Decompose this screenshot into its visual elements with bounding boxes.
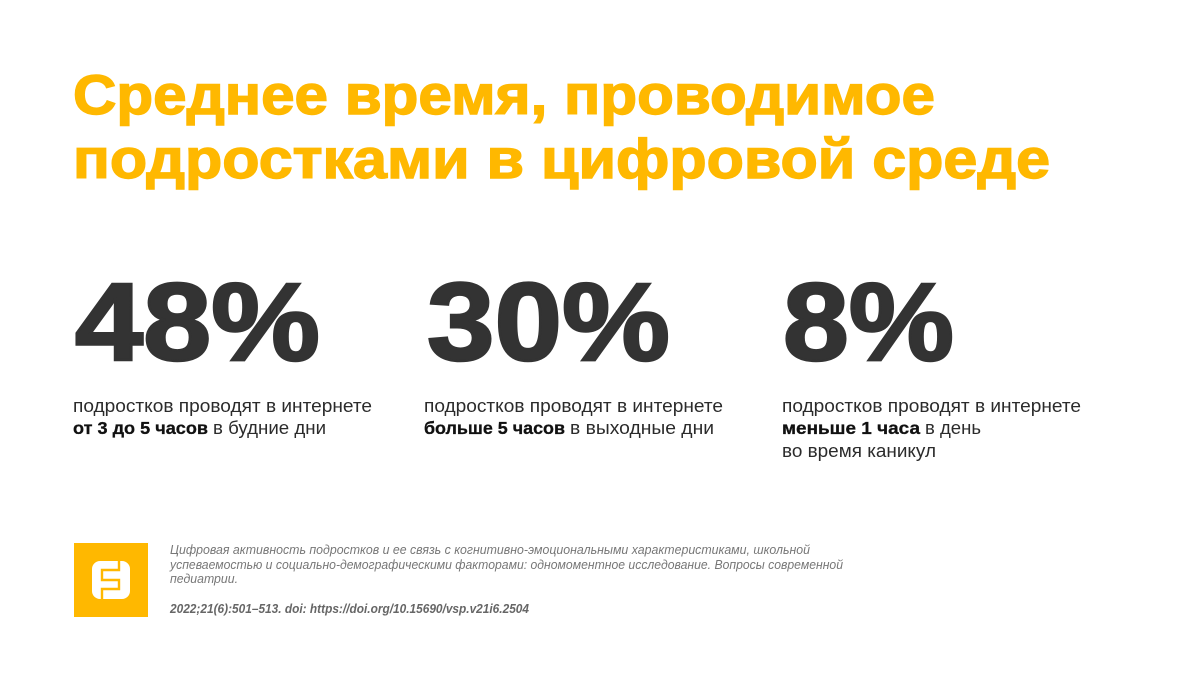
stat: 8%: 8% [783, 261, 954, 384]
description: 48% [73, 396, 372, 438]
stat: 48%: 48% [75, 261, 320, 384]
description: 48%: от 3 до 5 часов [73, 418, 208, 438]
description: 30%: в выходные дни [570, 418, 714, 438]
stat: 30%: 30% [427, 261, 670, 384]
stat: 30% [424, 261, 723, 438]
source citation: Цифровая активность подростков и ее связь с когнитивно-эмоциональными характеристиками, школьной [170, 543, 810, 557]
source citation: педиатрии. [170, 572, 238, 586]
description: 8%: подростков проводят в интернете [782, 396, 1081, 416]
source citation [169, 543, 843, 616]
description: 30%: больше 5 часов [424, 418, 565, 438]
stat: 8% [782, 261, 1081, 461]
description: 30%: подростков проводят в интернете [424, 396, 723, 416]
source citation: 2022;21(6):501–513. doi: https://doi.org/10.15690/vsp.v21i6.2504 [169, 602, 529, 616]
description: 48%: подростков проводят в интернете [73, 396, 372, 416]
stat: 48% [73, 261, 372, 438]
title: Среднее время, проводимое [73, 63, 935, 126]
description: 8%: меньше 1 часа [782, 418, 920, 438]
description: 8%: во время каникул [782, 441, 936, 461]
description: 8% [782, 396, 1081, 461]
description: 30% [424, 396, 723, 438]
description: 8%: в день [925, 418, 981, 438]
description: 48%: в будние дни [213, 418, 326, 438]
title: подростками в цифровой среде [73, 127, 1050, 190]
title [73, 63, 1050, 190]
logo icon [74, 543, 148, 617]
source citation: успеваемостью и социально-демографическими факторами: одномоментное исследование. Вопросы современной [169, 558, 843, 572]
